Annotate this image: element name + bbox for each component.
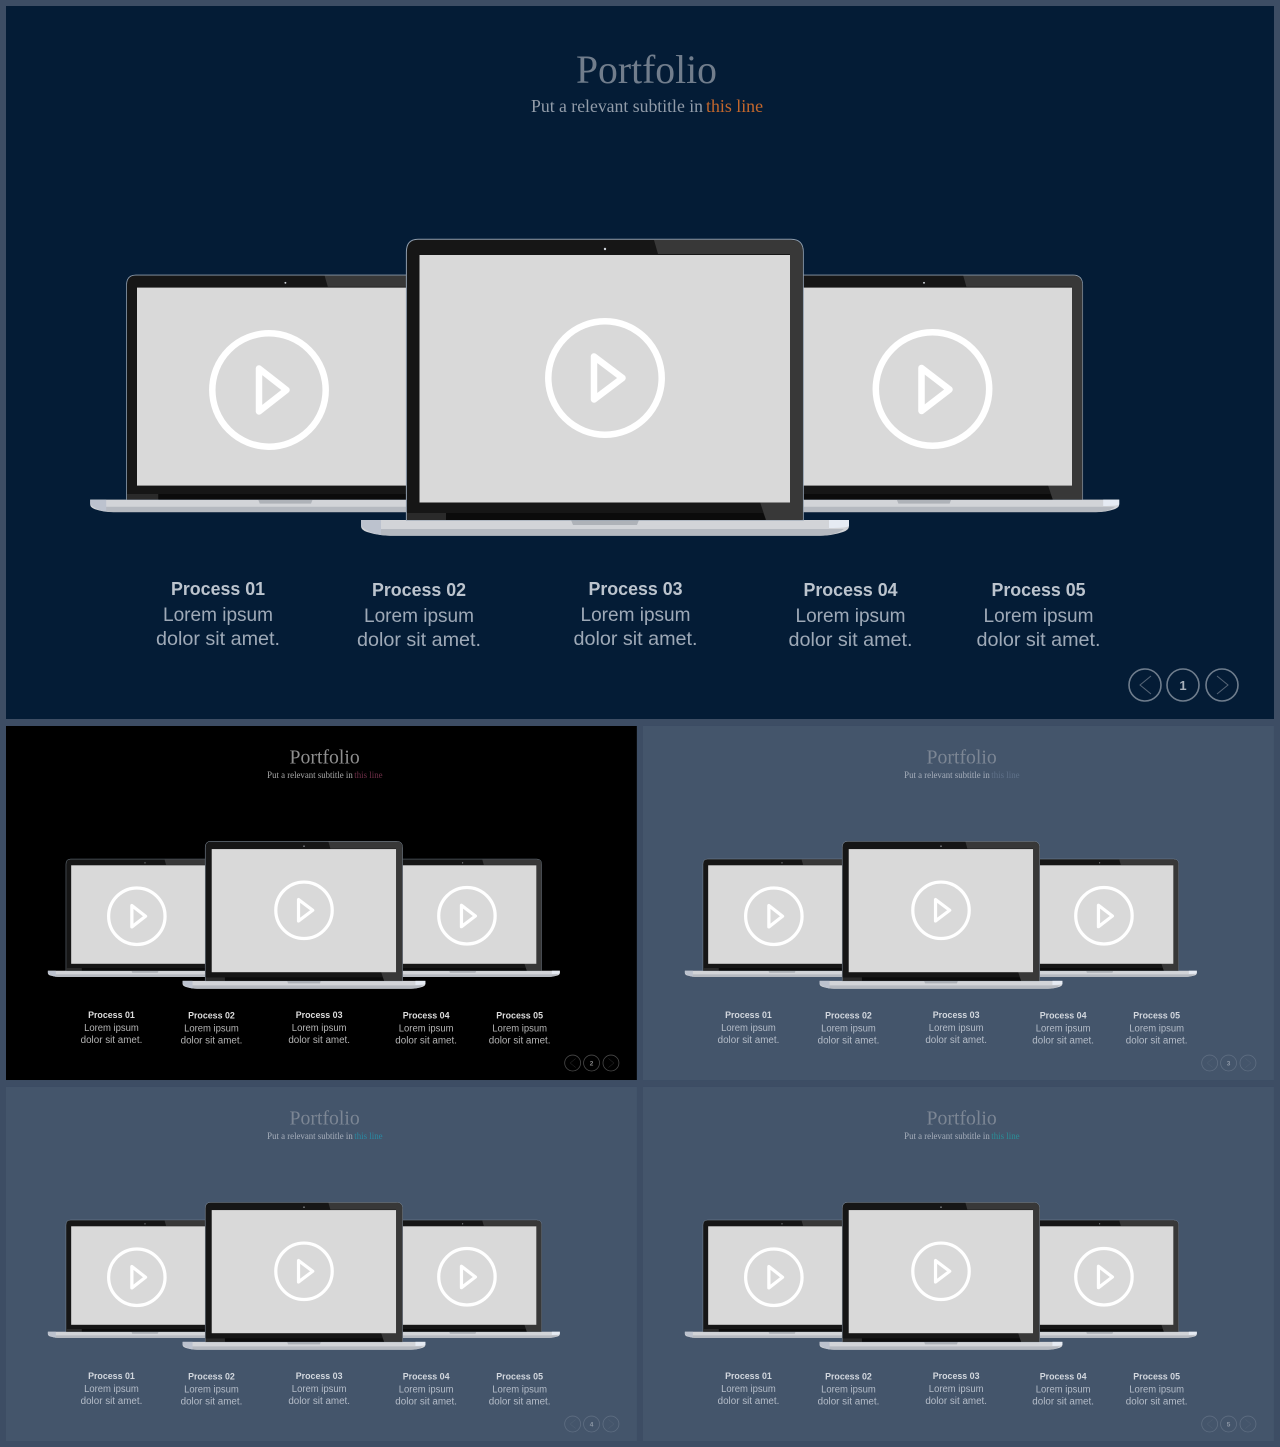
process 05: Lorem ipsum (984, 605, 1094, 627)
process 02: Lorem ipsum (184, 1024, 239, 1035)
process 05 (1126, 1372, 1188, 1408)
process 02: dolor sit amet. (818, 1036, 879, 1047)
subtitle: Put a relevant subtitle in (904, 770, 990, 780)
process 01: Lorem ipsum (721, 1023, 776, 1034)
title: Portfolio (927, 1108, 997, 1130)
process 04: dolor sit amet. (395, 1036, 457, 1047)
process 01: Process 01 (88, 1010, 135, 1020)
process 04 (1032, 1011, 1094, 1047)
process 03: Process 03 (933, 1010, 980, 1020)
process 03: dolor sit amet. (925, 1396, 987, 1407)
process 02 (181, 1011, 242, 1047)
process 05 (976, 580, 1100, 651)
laptop: center (183, 1202, 425, 1350)
process 05: Lorem ipsum (1129, 1024, 1184, 1035)
process 04: dolor sit amet. (1032, 1397, 1094, 1408)
process 04: Process 04 (403, 1011, 450, 1021)
process 02: Process 02 (825, 1011, 872, 1021)
laptop: right (366, 859, 560, 977)
process 03: Lorem ipsum (929, 1384, 984, 1395)
process 01: Process 01 (171, 579, 265, 599)
process 05 (489, 1011, 551, 1047)
process 01 (81, 1371, 142, 1407)
process 03 (288, 1010, 350, 1046)
title: Portfolio (576, 47, 717, 92)
process 04 (395, 1372, 457, 1408)
pagination controls: 2 (590, 1060, 594, 1067)
process 01: Lorem ipsum (84, 1384, 139, 1395)
process 05: Process 05 (496, 1011, 543, 1021)
process 01 (718, 1371, 779, 1407)
process 01: Lorem ipsum (721, 1384, 776, 1395)
process 04: Lorem ipsum (399, 1385, 454, 1396)
process 02 (181, 1372, 242, 1408)
process 05: Lorem ipsum (492, 1385, 547, 1396)
laptop: left (90, 275, 481, 512)
panel: slate slide thumbnail 4 (6, 1087, 637, 1441)
panel: black slide thumbnail (6, 726, 637, 1080)
process 02: dolor sit amet. (181, 1397, 242, 1408)
process 02 (818, 1011, 879, 1047)
process 04: Process 04 (1040, 1011, 1087, 1021)
process 05: dolor sit amet. (489, 1397, 551, 1408)
process 04: Lorem ipsum (1036, 1385, 1091, 1396)
process 04: Lorem ipsum (796, 605, 906, 627)
process 01 (81, 1010, 142, 1046)
process 01: Process 01 (725, 1010, 772, 1020)
process 03: dolor sit amet. (288, 1396, 350, 1407)
process 05: Process 05 (1133, 1011, 1180, 1021)
pagination controls (1202, 1055, 1256, 1071)
process 03: dolor sit amet. (574, 628, 698, 650)
process 02: Process 02 (825, 1372, 872, 1382)
process 03 (574, 579, 698, 650)
process 04: dolor sit amet. (788, 629, 912, 651)
title: Portfolio (290, 747, 360, 769)
process 05: Process 05 (496, 1372, 543, 1382)
process 03: Lorem ipsum (292, 1023, 347, 1034)
process 03: Process 03 (296, 1371, 343, 1381)
laptop: left (48, 1220, 242, 1338)
pagination controls: 1 (1179, 678, 1187, 693)
process 01 (718, 1010, 779, 1046)
process 05: Process 05 (992, 580, 1086, 600)
process 04 (1032, 1372, 1094, 1408)
process 05: dolor sit amet. (1126, 1036, 1188, 1047)
process 04 (788, 580, 912, 651)
process 03: dolor sit amet. (288, 1035, 350, 1046)
process 03 (925, 1371, 987, 1407)
process 05 (1126, 1011, 1188, 1047)
process 03 (925, 1010, 987, 1046)
panel: slate slide thumbnail 5 (643, 1087, 1274, 1441)
process 03: Lorem ipsum (292, 1384, 347, 1395)
process 04: Process 04 (1040, 1372, 1087, 1382)
laptop: left (685, 859, 879, 977)
process 02 (818, 1372, 879, 1408)
process 04: Lorem ipsum (399, 1024, 454, 1035)
title: Portfolio (927, 747, 997, 769)
process 02: Lorem ipsum (364, 605, 474, 627)
process 05: Process 05 (1133, 1372, 1180, 1382)
process 01: Lorem ipsum (163, 604, 273, 626)
pagination controls (1202, 1416, 1256, 1432)
process 02: Lorem ipsum (821, 1385, 876, 1396)
process 05: Lorem ipsum (492, 1024, 547, 1035)
process 02: Process 02 (188, 1011, 235, 1021)
process 03: Lorem ipsum (580, 604, 690, 626)
process 03: Process 03 (296, 1010, 343, 1020)
process 03: Process 03 (933, 1371, 980, 1381)
process 04: Process 04 (804, 580, 898, 600)
process 04: Process 04 (403, 1372, 450, 1382)
process 04: Lorem ipsum (1036, 1024, 1091, 1035)
process 05: dolor sit amet. (1126, 1397, 1188, 1408)
process 03: Lorem ipsum (929, 1023, 984, 1034)
process 01: Process 01 (88, 1371, 135, 1381)
process 02: Lorem ipsum (184, 1385, 239, 1396)
process 03: Process 03 (588, 579, 682, 599)
process 04: dolor sit amet. (395, 1397, 457, 1408)
process 02 (357, 580, 481, 651)
subtitle: Put a relevant subtitle in (531, 96, 703, 116)
process 04: dolor sit amet. (1032, 1036, 1094, 1047)
pagination controls (565, 1416, 619, 1432)
process 01 (156, 579, 280, 650)
laptop: right (366, 1220, 560, 1338)
process 05: Lorem ipsum (1129, 1385, 1184, 1396)
subtitle: this line (706, 96, 763, 116)
subtitle: this line (354, 1131, 383, 1141)
process 02: Process 02 (188, 1372, 235, 1382)
subtitle: Put a relevant subtitle in (267, 770, 353, 780)
process 02: Process 02 (372, 580, 466, 600)
laptop: center (361, 239, 849, 536)
title: Portfolio (290, 1108, 360, 1130)
process 01: Process 01 (725, 1371, 772, 1381)
process 01: Lorem ipsum (84, 1023, 139, 1034)
pagination controls (565, 1055, 619, 1071)
pagination controls: 4 (590, 1421, 594, 1428)
subtitle: Put a relevant subtitle in (904, 1131, 990, 1141)
pagination controls: 5 (1227, 1421, 1231, 1428)
process 01: dolor sit amet. (156, 628, 280, 650)
pagination controls: 3 (1227, 1060, 1231, 1067)
pagination controls (1129, 669, 1238, 701)
process 02: Lorem ipsum (821, 1024, 876, 1035)
process 05: dolor sit amet. (489, 1036, 551, 1047)
process 02: dolor sit amet. (818, 1397, 879, 1408)
process 05 (489, 1372, 551, 1408)
process 04 (395, 1011, 457, 1047)
subtitle: this line (354, 770, 383, 780)
panel: main portfolio slide (6, 6, 1274, 719)
laptop: center (820, 1202, 1062, 1350)
process 05: dolor sit amet. (976, 629, 1100, 651)
process 03: dolor sit amet. (925, 1035, 987, 1046)
process 01: dolor sit amet. (81, 1035, 142, 1046)
laptop: center (820, 841, 1062, 989)
process 01: dolor sit amet. (718, 1396, 779, 1407)
laptop: right (1003, 1220, 1197, 1338)
process 01: dolor sit amet. (81, 1396, 142, 1407)
process 02: dolor sit amet. (181, 1036, 242, 1047)
process 02: dolor sit amet. (357, 629, 481, 651)
panel: slate slide thumbnail 3 (643, 726, 1274, 1080)
laptop: right (1003, 859, 1197, 977)
laptop: center (183, 841, 425, 989)
laptop: left (48, 859, 242, 977)
subtitle: Put a relevant subtitle in (267, 1131, 353, 1141)
subtitle: this line (991, 770, 1020, 780)
subtitle: this line (991, 1131, 1020, 1141)
laptop: left (685, 1220, 879, 1338)
process 03 (288, 1371, 350, 1407)
laptop: right (729, 275, 1119, 512)
process 01: dolor sit amet. (718, 1035, 779, 1046)
